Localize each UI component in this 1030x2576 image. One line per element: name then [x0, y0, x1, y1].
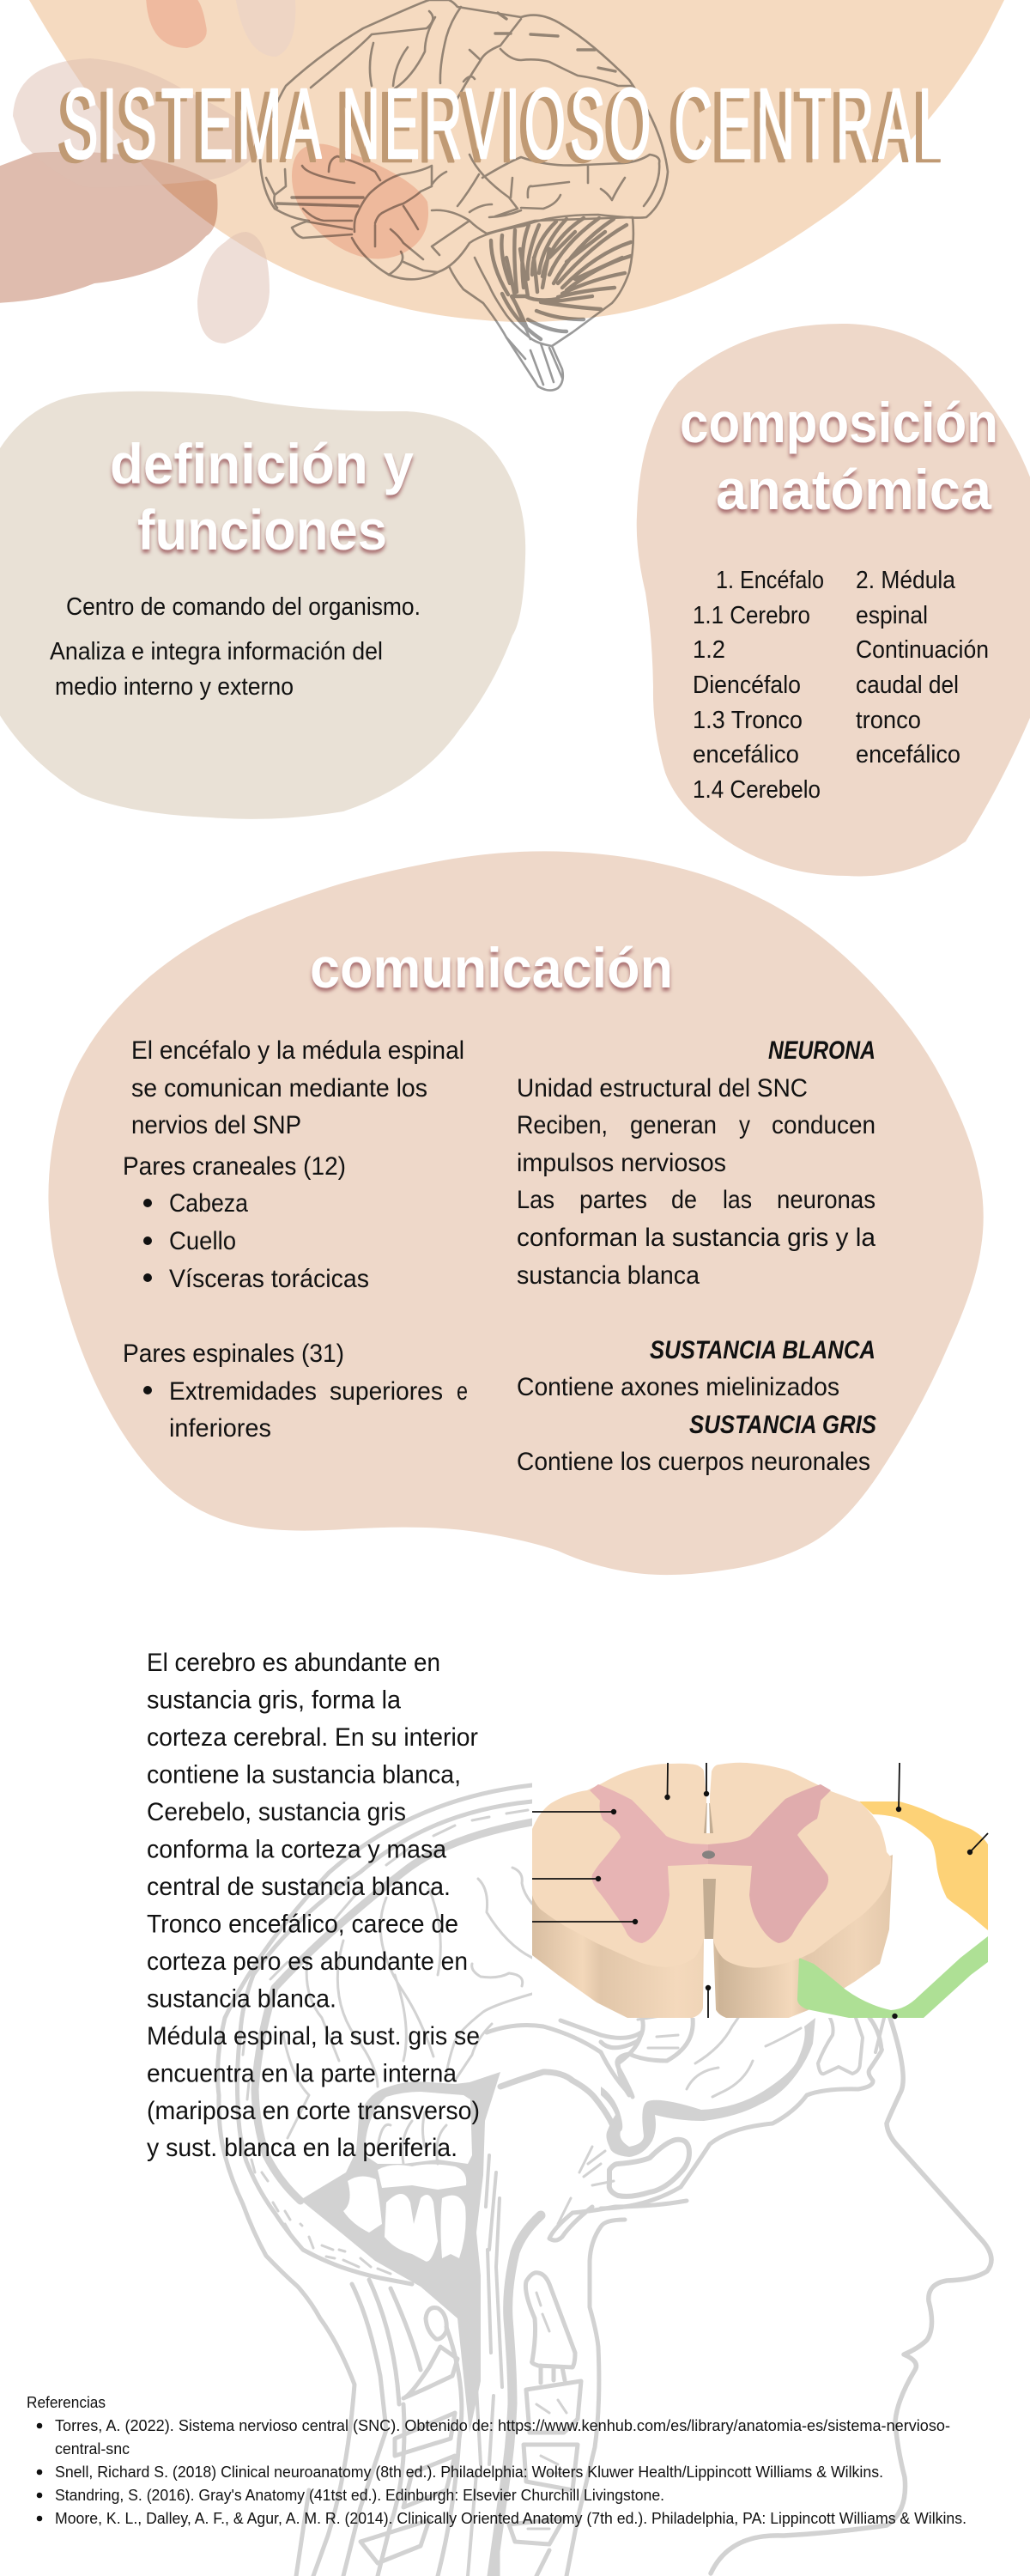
text block: neurona y sustancias: NEURONA: [768, 1036, 876, 1065]
cerebellum, wedge and brainstem: [300, 2072, 500, 2433]
heading: comunicación: comunicación: [310, 936, 673, 999]
references: Standring, S. (2016). Gray's Anatomy (41tst ed.). Edinburgh: Elsevier Churchill Livingstone.: [55, 2486, 664, 2504]
text block: nervios del SNP: Cuello: [169, 1227, 236, 1255]
panel: composición anatómica: [637, 324, 1030, 876]
text block: sustancia gris y blanca: El cerebro es abundante en: [147, 1649, 440, 1677]
text block: nervios del SNP: e: [457, 1377, 468, 1406]
text block: sustancia gris y blanca: Médula espinal, la sust. gris se: [147, 2022, 480, 2050]
text block: neurona y sustancias: [517, 1036, 876, 1476]
list: encéfalo: encefálico: [693, 741, 799, 769]
heading: definición y funciones: funciones: [137, 498, 387, 562]
bone dots: [243, 2039, 391, 2274]
panel: definición y funciones: [0, 392, 525, 819]
panel: comunicación: [48, 851, 984, 1575]
list: médula espinal: tronco: [856, 707, 921, 734]
list: médula espinal: encefálico: [856, 741, 960, 769]
white matter: [532, 1763, 891, 1968]
text block: nervios del SNP: Vísceras torácicas: [169, 1265, 369, 1293]
text block: nervios del SNP: [123, 1036, 468, 1443]
text block: sustancia gris y blanca: [147, 1649, 480, 2162]
list: encéfalo: [693, 567, 824, 804]
references: Snell, Richard S. (2018) Clinical neuroanatomy (8th ed.). Philadelphia: Wolters Kluwer Health/Lippincott Williams & Wilkins.: [55, 2463, 883, 2481]
text block: neurona y sustancias: SUSTANCIA GRIS: [689, 1411, 876, 1439]
text block: definition: [50, 593, 421, 701]
text block: sustancia gris y blanca: (mariposa en corte transverso): [147, 2097, 480, 2125]
text block: sustancia gris y blanca: sustancia gris, forma la: [147, 1686, 401, 1714]
list: médula espinal: 2. Médula: [856, 567, 955, 594]
text block: neurona y sustancias: Contiene los cuerpos neuronales: [517, 1448, 870, 1476]
references: Torres, A. (2022). Sistema nervioso central (SNC). Obtenido de: https://www.kenhub.com/es/library/anatomia-es/sistema-nervioso-: [55, 2416, 950, 2434]
list: encéfalo: Diencéfalo: [693, 671, 801, 699]
face profile: [711, 2018, 991, 2573]
list: encéfalo: 1.2: [693, 636, 725, 664]
list: médula espinal: caudal del: [856, 671, 959, 699]
green nerve root: [797, 1936, 988, 2018]
references: [27, 2393, 966, 2527]
heading: composición anatómica: composición: [680, 391, 998, 454]
list: encéfalo: 1.3 Tronco: [693, 707, 803, 734]
text block: neurona y sustancias: partes: [579, 1186, 647, 1214]
yellow nerve root: [859, 1801, 988, 1930]
skull back contours: [218, 1785, 532, 2576]
text block: neurona y sustancias: conforman la sustancia gris y la: [517, 1224, 876, 1252]
references: central-snc: [55, 2439, 130, 2458]
panel: spinal cord cross-section: [532, 1763, 988, 2019]
list: médula espinal: [856, 567, 989, 769]
text block: neurona y sustancias: generan: [630, 1111, 717, 1139]
text block: neurona y sustancias: Unidad estructural del SNC: [517, 1074, 808, 1103]
gray matter left: [590, 1784, 708, 1943]
references: Referencias: [27, 2393, 106, 2411]
text block: definition: medio interno y externo: [55, 673, 294, 701]
text block: definition: Centro de comando del organismo.: [66, 593, 421, 621]
list: encéfalo: 1.4 Cerebelo: [693, 776, 821, 804]
text block: sustancia gris y blanca: conforma la corteza y masa: [147, 1836, 446, 1863]
text block: neurona y sustancias: y: [739, 1111, 750, 1139]
icon: brain illustration: [260, 0, 668, 391]
text block: nervios del SNP: Extremidades: [169, 1377, 317, 1406]
text block: nervios del SNP: Pares craneales (12): [123, 1152, 346, 1181]
list: médula espinal: espinal: [856, 602, 928, 629]
text block: sustancia gris y blanca: encuentra en la parte interna: [147, 2059, 457, 2088]
text block: neurona y sustancias: neuronas: [777, 1186, 876, 1214]
text block: nervios del SNP: superiores: [330, 1377, 443, 1406]
text block: neurona y sustancias: las: [723, 1186, 752, 1214]
text block: neurona y sustancias: conducen: [772, 1111, 876, 1139]
text block: nervios del SNP: inferiores: [169, 1414, 271, 1443]
text block: nervios del SNP: Pares espinales (31): [123, 1340, 344, 1368]
header background blobs: [0, 0, 1004, 343]
text block: nervios del SNP: nervios del SNP: [131, 1111, 301, 1139]
text block: neurona y sustancias: Contiene axones mielinizados: [517, 1373, 839, 1401]
list: médula espinal: Continuación: [856, 636, 989, 664]
text block: sustancia gris y blanca: central de sustancia blanca.: [147, 1873, 451, 1901]
text block: definition: Analiza e integra información del: [50, 638, 383, 665]
text block: neurona y sustancias: sustancia blanca: [517, 1261, 700, 1290]
text block: nervios del SNP: Cabeza: [169, 1189, 248, 1218]
text block: sustancia gris y blanca: corteza cerebral. En su interior: [147, 1723, 478, 1752]
text block: sustancia gris y blanca: Cerebelo, sustancia gris: [147, 1798, 406, 1826]
text block: neurona y sustancias: Reciben,: [517, 1111, 608, 1139]
text block: neurona y sustancias: impulsos nerviosos: [517, 1149, 726, 1177]
text block: sustancia gris y blanca: corteza pero es abundante en: [147, 1947, 468, 1976]
illustration: head sagittal section: [218, 1785, 991, 2576]
heading: composición anatómica: anatómica: [716, 458, 992, 521]
text block: neurona y sustancias: Las: [517, 1186, 554, 1214]
gray matter right: [708, 1784, 831, 1943]
text block: sustancia gris y blanca: y sust. blanca en la periferia.: [147, 2134, 457, 2162]
heading: composición anatómica: [680, 391, 998, 521]
text block: sustancia gris y blanca: contiene la sustancia blanca,: [147, 1760, 461, 1789]
label leader lines: [532, 1763, 988, 2019]
heading: definición y funciones: definición y: [110, 432, 414, 495]
heading: definición y funciones: [110, 432, 414, 562]
list: encéfalo: 1. Encéfalo: [716, 567, 824, 594]
central column and fissures: [703, 1803, 716, 1939]
text block: nervios del SNP: El encéfalo y la médula espinal: [131, 1036, 464, 1065]
cranial base band: [601, 2018, 815, 2157]
text block: neurona y sustancias: SUSTANCIA BLANCA: [650, 1336, 876, 1364]
brain sulci: [283, 1868, 532, 2138]
text block: neurona y sustancias: de: [671, 1186, 697, 1214]
text block: sustancia gris y blanca: Tronco encefálico, carece de: [147, 1910, 458, 1939]
text block: sustancia gris y blanca: sustancia blanca.: [147, 1985, 336, 2013]
cord side walls: [532, 1855, 893, 2018]
references: Moore, K. L., Dalley, A. F., & Agur, A. M. R. (2014). Clinically Oriented Anatomy (7th ed.). Philadelphia, PA: Lippincott Williams & Wilkins.: [55, 2509, 966, 2527]
text block: nervios del SNP: se comunican mediante los: [131, 1074, 427, 1103]
list: encéfalo: 1.1 Cerebro: [693, 602, 810, 629]
central canal: [702, 1850, 715, 1859]
